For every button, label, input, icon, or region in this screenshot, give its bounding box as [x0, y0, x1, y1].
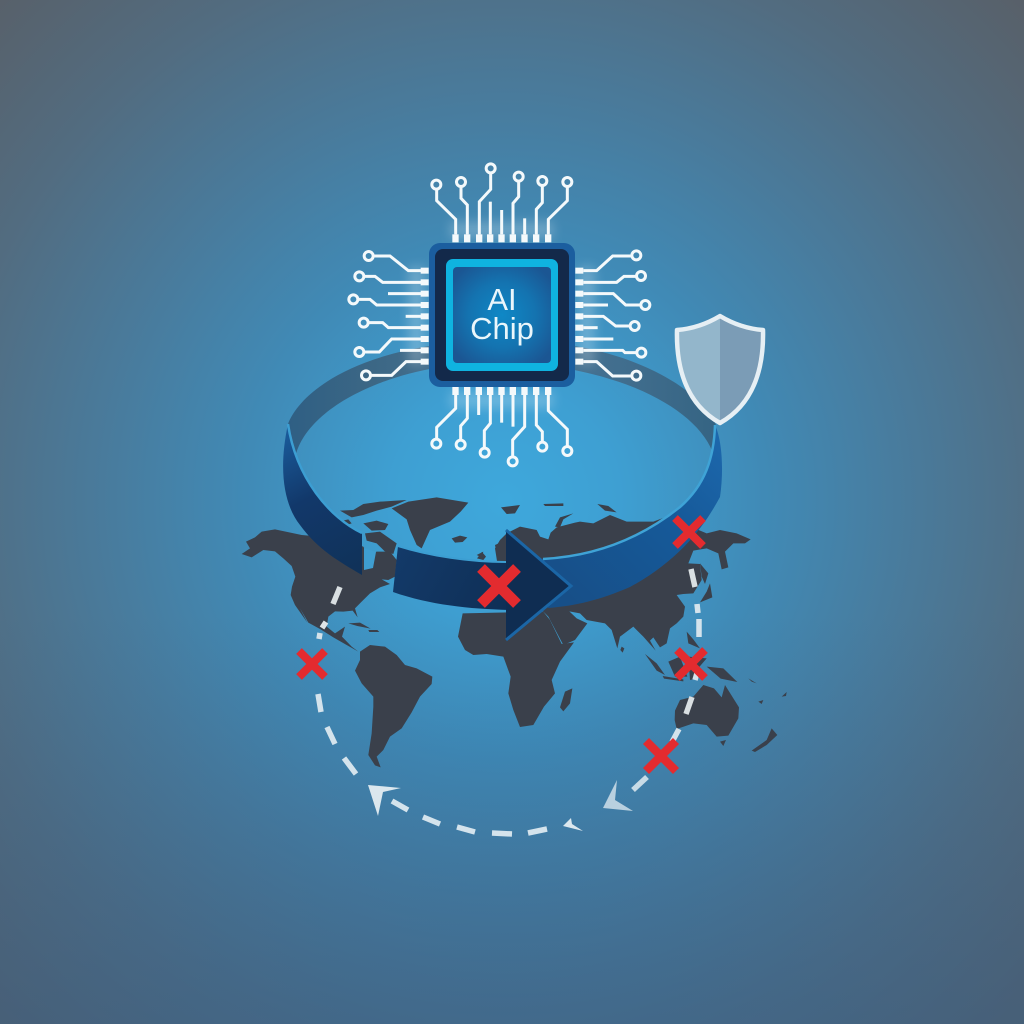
traces: top — [432, 164, 572, 234]
shield: outline — [677, 316, 763, 423]
traces: bottom — [432, 395, 572, 466]
marker: central X — [481, 568, 517, 604]
route arrowhead: left — [368, 785, 401, 816]
traces: left — [349, 251, 421, 380]
map: Americas — [242, 497, 520, 767]
marker: northeast X — [675, 518, 703, 546]
pins — [421, 234, 583, 395]
chip: outer package — [429, 243, 575, 387]
shield: right face — [720, 315, 763, 423]
world map — [242, 497, 787, 767]
marker: west X — [299, 651, 325, 677]
map: Eurasia, Africa and Oceania — [458, 503, 787, 752]
chip: cyan frame — [446, 259, 558, 371]
marker: south X — [646, 741, 676, 771]
map: Hudson Bay water — [364, 548, 376, 570]
chip: dark substrate — [435, 249, 569, 381]
main arrowhead — [506, 530, 571, 640]
chip traces and pins — [349, 164, 650, 466]
chip label: Chip — [470, 311, 534, 346]
ring: back band — [288, 340, 716, 456]
chip label: AI — [487, 282, 517, 317]
AI chip — [429, 243, 575, 387]
traces: right — [583, 251, 650, 380]
shield icon — [677, 315, 763, 423]
ring: front band middle — [393, 546, 510, 610]
route arrowhead: right — [603, 780, 633, 811]
shield: left face — [677, 315, 720, 423]
route arrowhead: small — [563, 818, 583, 831]
dashed route — [318, 569, 699, 834]
marker: southeast Asia X — [677, 650, 705, 678]
traces glow — [408, 222, 595, 408]
ring: front band left — [283, 424, 362, 575]
chip: core — [453, 267, 551, 363]
ring: front band right — [540, 425, 722, 608]
red X markers — [299, 518, 705, 771]
route dashes — [318, 569, 699, 834]
